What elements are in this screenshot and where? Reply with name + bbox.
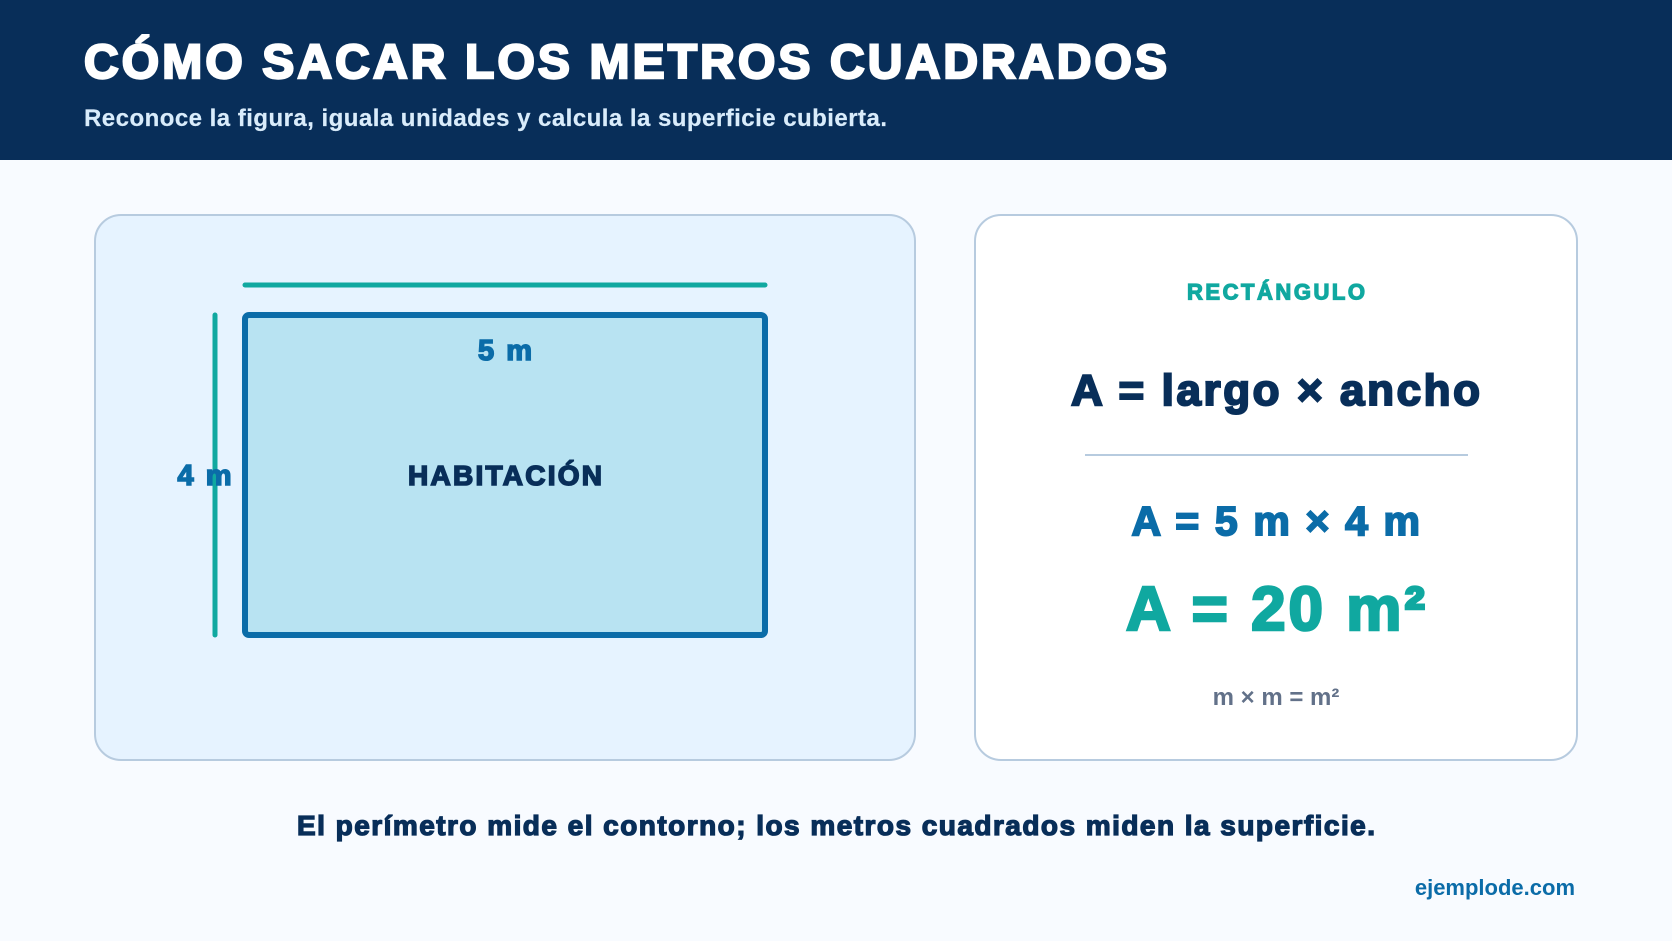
bottom takeaway: El perímetro mide el contorno; los metros cuadrados miden la superficie. xyxy=(297,810,1375,841)
divider xyxy=(1085,454,1468,456)
unit note: m × m = m² xyxy=(1213,684,1339,711)
source credit: ejemplode.com xyxy=(1415,875,1575,900)
title: CÓMO SACAR LOS METROS CUADRADOS xyxy=(84,34,1167,89)
room rectangle xyxy=(245,315,765,635)
substitution: A = 5 m × 4 m xyxy=(1132,498,1420,544)
shape name: RECTÁNGULO xyxy=(1187,280,1365,304)
width label: 5 m xyxy=(478,335,532,367)
width dimension line xyxy=(245,282,765,288)
room label: HABITACIÓN xyxy=(408,460,602,491)
panel: formula xyxy=(975,215,1577,760)
general formula: A = largo × ancho xyxy=(1071,366,1480,415)
subtitle: Reconoce la figura, iguala unidades y calcula la superficie cubierta. xyxy=(84,105,887,132)
result: A = 20 m² xyxy=(1126,575,1425,644)
panel: room diagram xyxy=(95,215,915,760)
height dimension line xyxy=(212,315,218,635)
header band xyxy=(0,0,1672,160)
height label: 4 m xyxy=(178,460,232,492)
